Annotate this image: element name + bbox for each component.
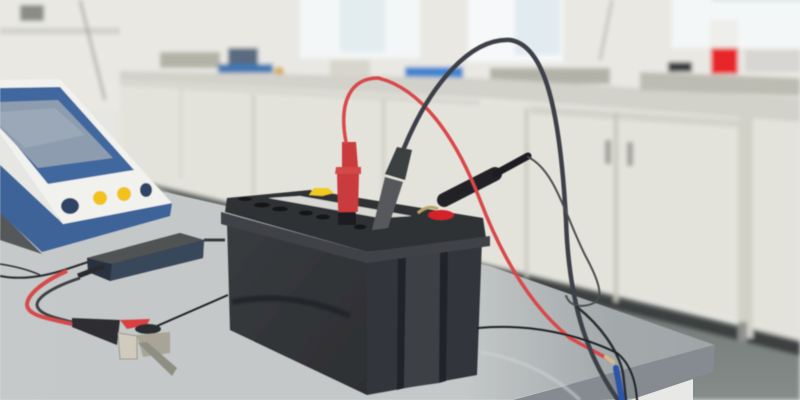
red lead <box>27 271 72 324</box>
lip <box>221 212 490 263</box>
red wire from probe over battery down to table <box>344 78 610 360</box>
counter-top clutter <box>160 52 220 68</box>
battery front face <box>367 240 482 395</box>
black plug <box>444 174 495 200</box>
cables <box>344 40 637 400</box>
battery side face <box>227 222 367 395</box>
device body <box>0 79 172 224</box>
thin wire from plug looping <box>528 157 599 306</box>
lid <box>225 190 486 252</box>
red probe <box>335 142 361 225</box>
vent holes <box>238 197 366 230</box>
tester device <box>0 79 172 254</box>
floor <box>120 176 800 400</box>
device bezel <box>0 87 134 184</box>
device screen <box>0 100 113 168</box>
grey probe <box>372 147 412 230</box>
wire tip <box>606 357 613 362</box>
device shadow <box>0 212 42 254</box>
screen bands <box>0 108 85 148</box>
terminal hardware <box>418 207 438 213</box>
blue connector <box>616 368 622 400</box>
black wire on table <box>478 327 637 400</box>
black lead <box>37 278 80 322</box>
counter-top <box>120 71 800 122</box>
door top bands <box>530 106 745 128</box>
table top <box>0 192 715 400</box>
dark wire from grey probe arching over <box>404 40 618 400</box>
lid label <box>268 196 412 218</box>
battery <box>221 142 528 395</box>
table edge <box>513 345 715 400</box>
handheld meter with leads <box>0 233 228 376</box>
table leg panel <box>630 379 693 400</box>
buttons <box>61 183 152 214</box>
reflection <box>480 352 580 400</box>
yellow cap <box>309 188 334 196</box>
cabinets <box>120 80 800 345</box>
red terminal cap <box>428 210 454 220</box>
clamp <box>72 318 177 376</box>
ribs <box>397 253 406 390</box>
reflection <box>232 298 350 316</box>
device base <box>0 165 172 252</box>
